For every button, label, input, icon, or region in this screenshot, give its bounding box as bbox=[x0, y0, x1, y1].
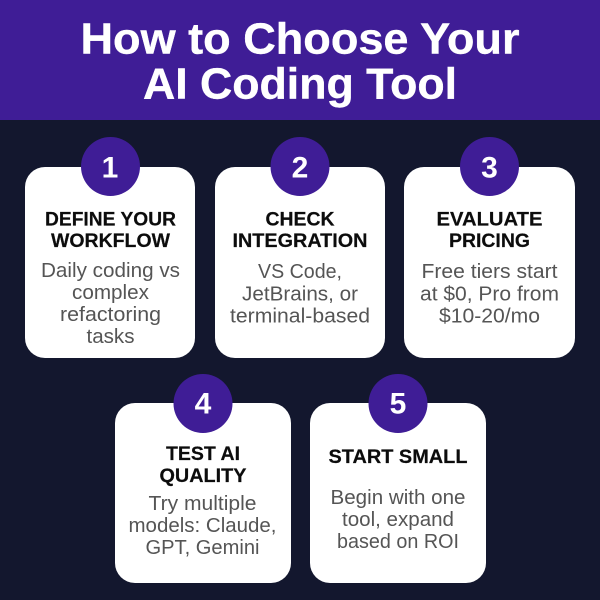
panel: step 5 start small bbox=[310, 374, 486, 583]
heading: evaluate pricing bbox=[436, 208, 542, 252]
text: step 2 description bbox=[230, 261, 370, 328]
text: step 5 description: tool, expand bbox=[342, 509, 454, 531]
icon: number 1 badge bbox=[81, 137, 140, 196]
icon: number 3 badge bbox=[460, 137, 519, 196]
heading: define your workflow bbox=[45, 208, 176, 252]
text: step 3 description: $10-20/mo bbox=[439, 306, 540, 328]
heading: start small: START SMALL bbox=[328, 446, 468, 468]
title: AI Coding Tool bbox=[143, 60, 457, 108]
text: step 1 description: complex bbox=[72, 282, 149, 304]
icon: number 2 badge: 2 bbox=[292, 152, 308, 184]
text: step 5 description: Begin with one bbox=[330, 487, 466, 509]
text: step 2 description: JetBrains, or bbox=[242, 284, 358, 306]
icon: number 5 badge: 5 bbox=[390, 388, 406, 420]
heading: test ai quality: QUALITY bbox=[160, 465, 246, 487]
heading: test ai quality: TEST AI bbox=[166, 443, 240, 465]
text: step 1 description: refactoring bbox=[60, 304, 161, 326]
text: step 1 description: tasks bbox=[86, 326, 134, 348]
text: step 5 description: based on ROI bbox=[337, 531, 459, 553]
header banner bbox=[0, 0, 600, 120]
title: How to Choose Your bbox=[80, 14, 520, 64]
title bbox=[80, 14, 520, 108]
icon: number 1 badge: 1 bbox=[102, 152, 118, 184]
text: step 2 description: terminal-based bbox=[230, 306, 370, 328]
heading: define your workflow: DEFINE YOUR bbox=[45, 208, 176, 230]
heading: test ai quality bbox=[160, 443, 246, 487]
heading: check integration: INTEGRATION bbox=[232, 230, 368, 252]
icon: number 4 badge: 4 bbox=[195, 388, 212, 420]
text: step 4 description bbox=[128, 493, 276, 559]
text: step 3 description: Free tiers start bbox=[422, 261, 558, 283]
heading: check integration: CHECK bbox=[266, 208, 334, 230]
text: step 3 description bbox=[420, 261, 559, 328]
icon: number 3 badge: 3 bbox=[481, 152, 498, 184]
heading: define your workflow: WORKFLOW bbox=[51, 230, 171, 252]
panel: step 1 define your workflow bbox=[25, 137, 195, 358]
text: step 3 description: at $0, Pro from bbox=[420, 284, 559, 306]
text: step 4 description: GPT, Gemini bbox=[146, 537, 260, 559]
panel: step 4 test ai quality bbox=[115, 374, 291, 583]
text: step 2 description: VS Code, bbox=[258, 261, 342, 283]
panel: step 2 check integration bbox=[215, 137, 385, 358]
text: step 1 description: Daily coding vs bbox=[41, 260, 180, 282]
text: step 1 description bbox=[41, 260, 180, 348]
heading: evaluate pricing: EVALUATE bbox=[436, 208, 542, 230]
heading: evaluate pricing: PRICING bbox=[449, 230, 530, 252]
icon: number 4 badge bbox=[174, 374, 232, 433]
text: step 5 description bbox=[330, 487, 466, 553]
panel: step 3 evaluate pricing bbox=[404, 137, 575, 358]
text: step 4 description: Try multiple bbox=[148, 493, 256, 515]
icon: number 5 badge bbox=[368, 374, 428, 433]
icon: number 2 badge bbox=[270, 137, 330, 196]
heading: check integration bbox=[232, 208, 368, 252]
text: step 4 description: models: Claude, bbox=[128, 515, 276, 537]
